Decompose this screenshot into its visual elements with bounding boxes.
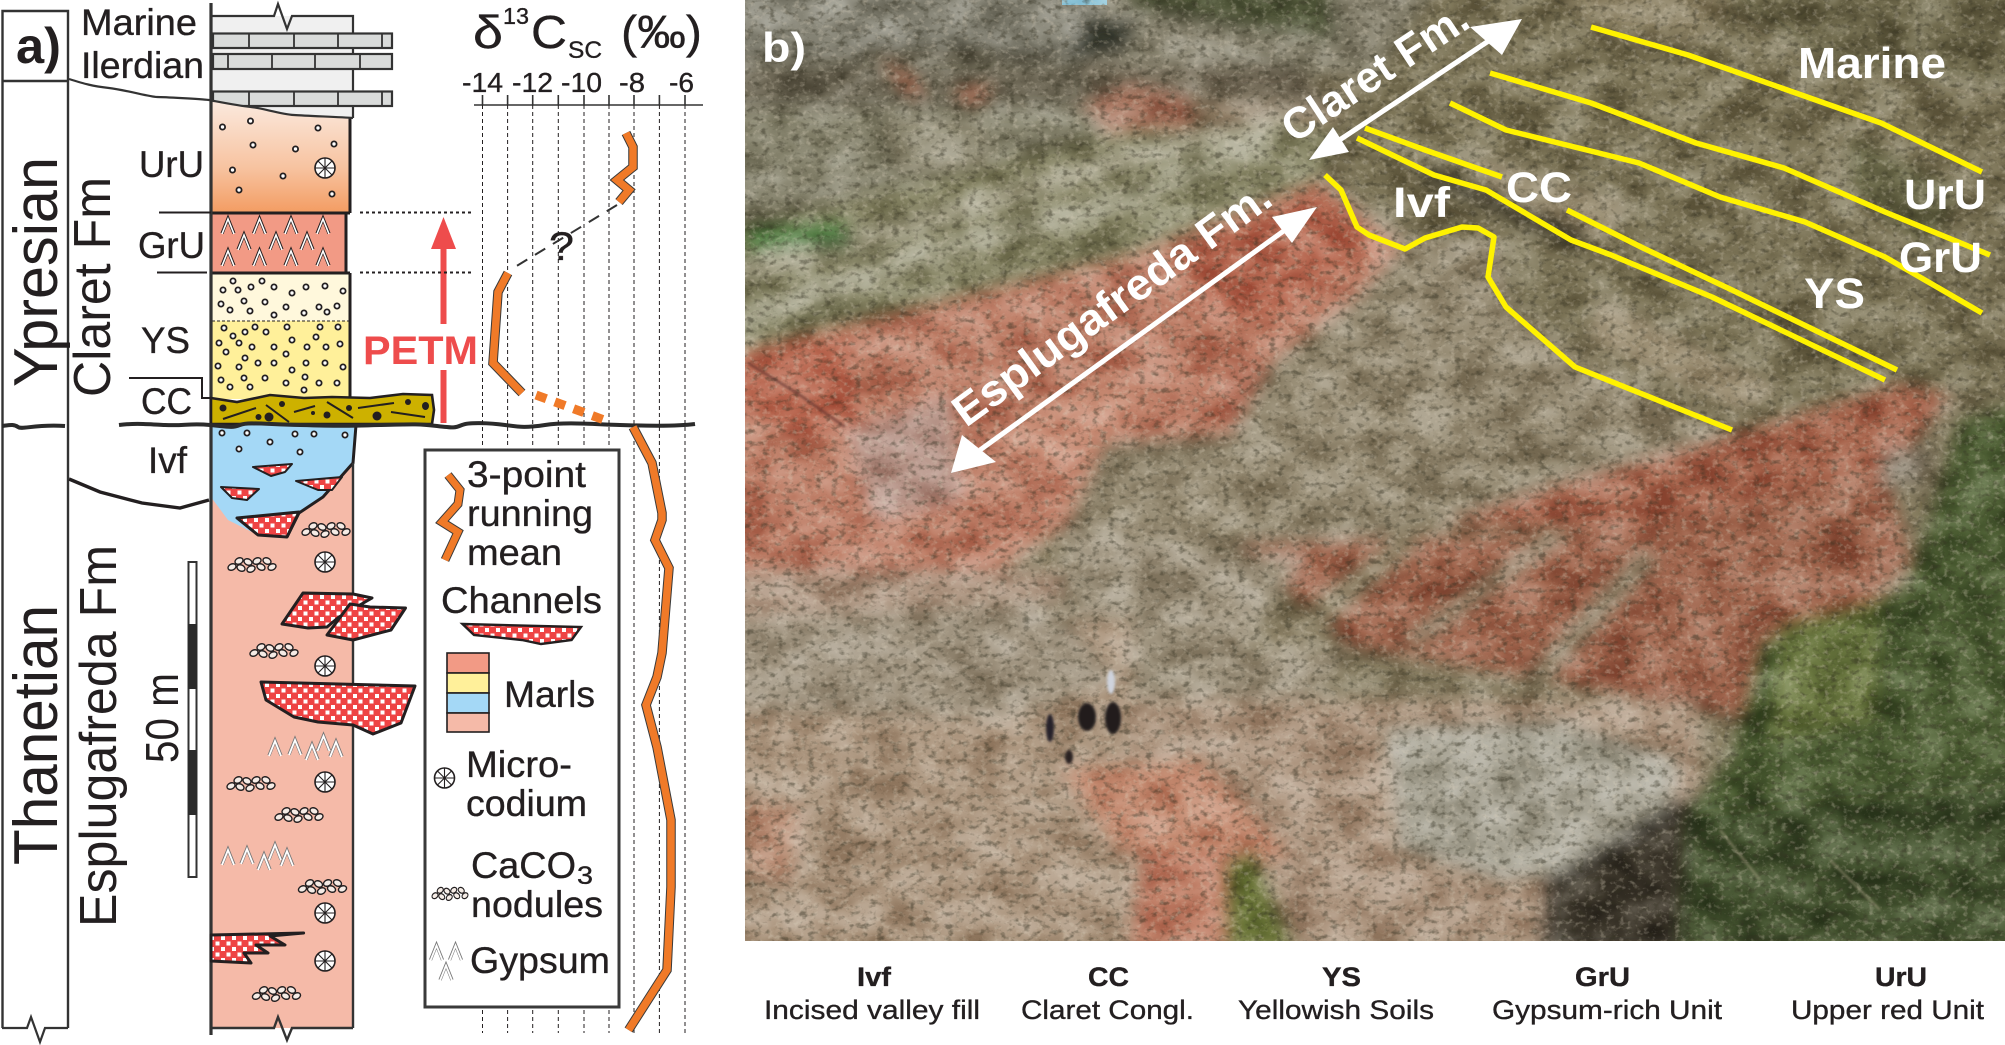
scale bar	[136, 562, 197, 877]
PETM dotted limits	[360, 212, 474, 272]
chart title: 13	[503, 3, 529, 29]
gypsum in marls	[222, 736, 342, 870]
PETM arrow	[363, 217, 478, 423]
contact incision line	[69, 479, 209, 508]
key YS: YS	[1322, 962, 1361, 992]
photo illustration	[725, 0, 2005, 950]
age label Ypresian: Ypresian	[2, 157, 71, 387]
unit labels: CC	[141, 381, 192, 422]
key CC: CC	[1088, 962, 1129, 992]
legend running mean	[442, 454, 593, 573]
scale label: 50 m	[136, 673, 188, 763]
label CC: CC	[1506, 164, 1572, 212]
legend	[425, 450, 619, 1007]
key Ivf: Ivf	[857, 962, 892, 992]
legend running mean: 3-point	[467, 454, 587, 495]
label Ilerdian: Ilerdian	[81, 45, 204, 86]
chart title: SC	[568, 37, 602, 64]
axis line and ticks	[474, 95, 703, 105]
panel a: stratigraphic log	[2, 2, 703, 1042]
legend microcodium: codium	[466, 783, 587, 824]
key YS	[1238, 962, 1434, 1025]
legend microcodium	[434, 744, 587, 824]
label Ivf: Ivf	[1393, 179, 1451, 227]
chronostratigraphy column	[2, 11, 68, 1042]
legend gypsum: Gypsum	[470, 940, 610, 981]
legend marls: Marls	[504, 674, 595, 715]
key UrU: UrU	[1875, 962, 1927, 992]
label Marine: Marine	[81, 2, 197, 43]
legend channels	[441, 580, 602, 644]
key UrU	[1791, 962, 1985, 1025]
unit key	[764, 962, 1985, 1025]
nodule clusters	[226, 522, 351, 1002]
arrow: Esplugafreda Fm	[943, 172, 1317, 473]
photo light rock texture	[745, 0, 2005, 941]
label Marine: Marine	[1798, 39, 1946, 88]
chart title: (‰)	[621, 6, 702, 58]
key GrU	[1492, 962, 1723, 1025]
grid lines	[482, 105, 685, 1033]
photo sky glimpse	[1062, 0, 1107, 5]
legend marls	[447, 653, 595, 732]
key YS: Yellowish Soils	[1238, 995, 1434, 1025]
legend nodules: 3	[577, 862, 593, 890]
photo people and details	[748, 363, 1880, 910]
arrow: Claret Fm	[1272, 0, 1522, 160]
chart title: δ	[473, 6, 503, 58]
key CC	[1021, 962, 1194, 1025]
legend nodules: nodules	[471, 884, 603, 925]
contact Ilerdian line	[69, 79, 353, 118]
column units	[211, 3, 356, 1040]
unit labels: GrU	[138, 225, 205, 266]
key Ivf	[764, 962, 980, 1025]
conglomerate CC	[211, 394, 434, 424]
chart title: C	[531, 6, 567, 58]
unit labels: YS	[141, 320, 190, 361]
PETM label: PETM	[363, 329, 478, 373]
small nodules	[218, 121, 454, 876]
panel letter b: b)	[762, 24, 806, 71]
marine limestone beds	[211, 4, 392, 118]
unconformity line	[2, 423, 695, 428]
key UrU: Upper red Unit	[1791, 995, 1985, 1025]
age label Thanetian: Thanetian	[2, 605, 71, 865]
chart title	[473, 3, 702, 64]
axis tick labels	[462, 67, 694, 98]
unit labels: Ivf	[148, 440, 188, 481]
isotope chart	[462, 3, 703, 1033]
unit labels: UrU	[139, 144, 204, 185]
panel b: field photograph	[725, 0, 2005, 1025]
unit Ivf	[211, 425, 356, 537]
legend nodules	[431, 845, 603, 925]
channel bodies	[211, 464, 415, 963]
carbon isotope curve	[493, 133, 671, 1030]
formation label Esplugafreda: Esplugafreda Fm	[70, 545, 128, 927]
label GrU: GrU	[1899, 234, 1982, 282]
photo large-scale mottling	[745, 0, 2005, 941]
legend channels: Channels	[441, 580, 602, 621]
gypsum in GrU	[222, 218, 329, 266]
legend microcodium: Micro-	[466, 744, 572, 785]
axis tick labels: -14	[462, 67, 503, 98]
axis tick labels: -8	[619, 67, 645, 98]
photo dark vegetation texture	[745, 0, 2005, 941]
question mark: ?	[549, 225, 574, 269]
label Esplugafreda Fm: Esplugafreda Fm.	[943, 172, 1281, 436]
key GrU: Gypsum-rich Unit	[1492, 995, 1723, 1025]
photo labels	[762, 24, 1986, 318]
formation label Claret: Claret Fm	[64, 177, 122, 397]
unit UrU	[211, 100, 350, 213]
key CC: Claret Congl.	[1021, 995, 1194, 1025]
axis tick labels: -10	[561, 67, 602, 98]
unit YS lower	[212, 321, 350, 399]
unit GrU	[212, 213, 346, 273]
key GrU: GrU	[1575, 962, 1630, 992]
axis tick labels: -6	[669, 67, 694, 98]
unit Thanetian marls	[211, 425, 353, 1028]
legend nodules: CaCO	[471, 845, 576, 886]
panel letter a: a)	[16, 18, 61, 74]
yellow stratigraphic lines	[1325, 27, 1990, 430]
legend running mean: running	[467, 493, 593, 534]
label YS: YS	[1804, 270, 1865, 318]
key Ivf: Incised valley fill	[764, 995, 980, 1025]
boundary ticks	[129, 212, 212, 398]
unit labels	[138, 144, 205, 481]
axis tick labels: -12	[512, 67, 553, 98]
label UrU: UrU	[1904, 171, 1986, 219]
microcodium symbols	[315, 158, 335, 971]
unit YS upper	[212, 273, 350, 321]
legend running mean: mean	[467, 532, 562, 573]
